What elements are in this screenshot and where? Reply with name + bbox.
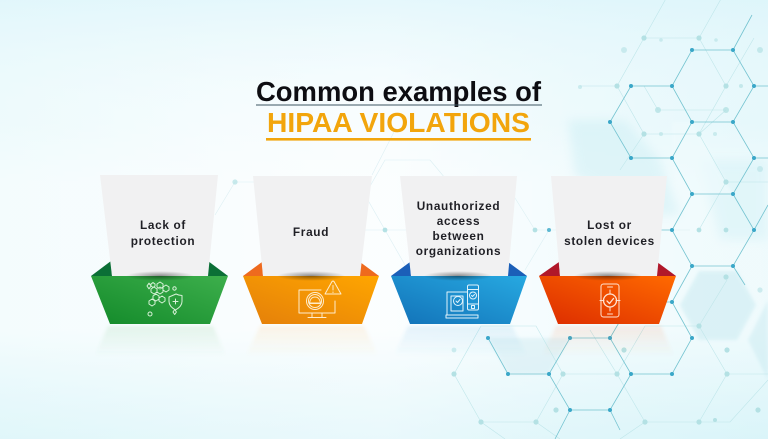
icon: laptop and phone	[446, 285, 478, 318]
label: protection	[131, 234, 195, 248]
label: Unauthorized	[417, 199, 500, 213]
label: Lost or	[587, 218, 632, 232]
panel: lack of protection	[91, 175, 228, 356]
label: access	[437, 214, 480, 228]
hexagon network: faint layer	[215, 0, 768, 439]
icon: phone with target	[600, 284, 620, 317]
hexagon network: strong layer	[486, 15, 768, 439]
panel: unauthorized access	[391, 176, 527, 356]
label: between	[433, 229, 484, 243]
label: Lack of	[140, 218, 186, 232]
title	[256, 76, 542, 141]
icon: shield and hexagons	[147, 282, 182, 316]
icon: monitor with warning	[299, 281, 341, 318]
panel: lost or stolen devices	[539, 176, 676, 356]
label: organizations	[416, 244, 501, 258]
panel: fraud	[243, 176, 379, 356]
label: stolen devices	[564, 234, 655, 248]
title: HIPAA VIOLATIONS	[267, 107, 530, 138]
label: Fraud	[293, 225, 329, 239]
title: Common examples of	[256, 76, 542, 107]
